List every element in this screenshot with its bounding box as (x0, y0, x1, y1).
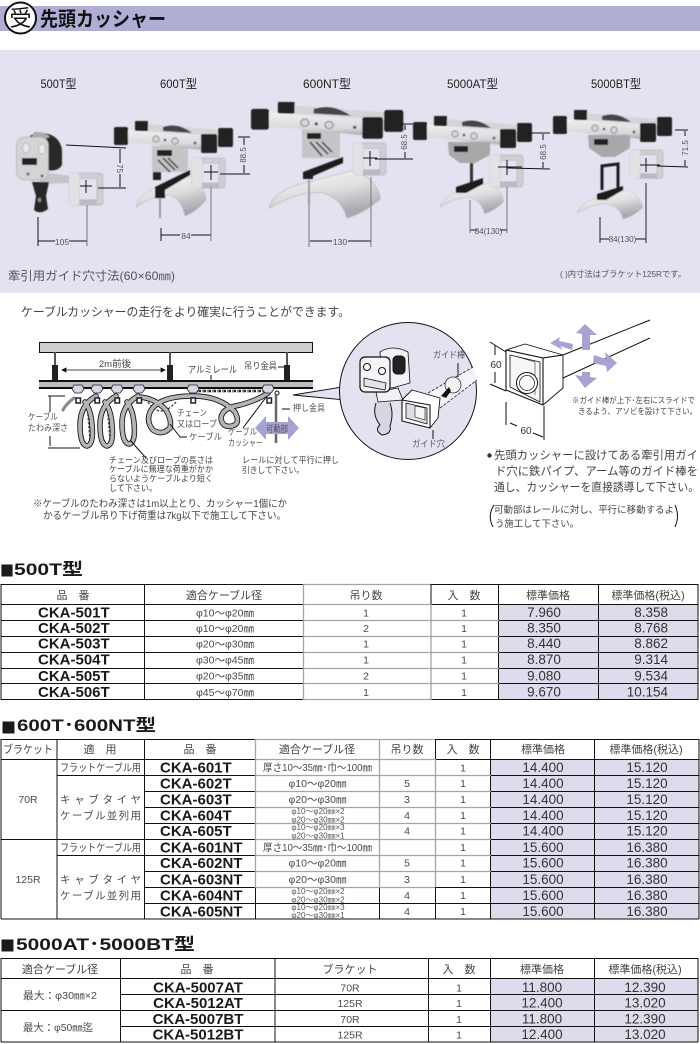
row CKA-602NT: 16.380 (626, 856, 668, 870)
cable size cells: 最大：φ30㎜×2 (23, 989, 97, 1002)
movable part note: う施工して下さい。 (495, 518, 579, 530)
row CKA-506T: φ45～φ70㎜ (196, 687, 254, 699)
trolley (360, 348, 410, 435)
row CKA-602T: CKA-602T (160, 775, 232, 792)
product: 500T: 105 (55, 237, 69, 247)
row CKA-602T: 5 (404, 778, 410, 790)
hanger label: 吊り金具 (244, 360, 277, 371)
arrow: movable part (255, 416, 299, 440)
product: 600T: 88.5 (239, 147, 248, 163)
row CKA-5012BT (153, 1027, 666, 1044)
row CKA-502T: CKA-502T (38, 620, 110, 637)
sag depth dimension: ケーブル (28, 411, 58, 422)
icon: circled 受: 受 (9, 6, 32, 31)
row CKA-602T: φ10～φ20㎜ (289, 778, 347, 790)
row CKA-503T: 8.440 (527, 636, 561, 651)
heading: 5000AT 5000BT: ■ (0, 935, 15, 956)
row CKA-601NT: 16.380 (626, 840, 668, 855)
row CKA-505T: CKA-505T (38, 668, 110, 685)
row CKA-502T: 8.768 (634, 620, 668, 636)
row CKA-601T: 1 (460, 762, 466, 774)
row CKA-602NT: CKA-602NT (160, 855, 243, 872)
row CKA-603NT: 3 (404, 874, 410, 886)
row CKA-506T: 9.670 (527, 684, 561, 700)
row CKA-601T (160, 760, 668, 777)
lead text: ケーブルカッシャーの走行をより確実に行うことができます。 (21, 304, 350, 319)
dimension: 60 height: 60 (490, 360, 502, 371)
row CKA-605T: 4 (404, 826, 410, 838)
heading: 500T (0, 560, 83, 581)
row CKA-604NT: 4 (404, 890, 410, 902)
row CKA-501T: CKA-501T (38, 605, 110, 622)
cable trolley label (228, 396, 267, 448)
row CKA-604NT: φ10～φ20㎜×2 (291, 887, 345, 896)
product: 500T: 75 (115, 164, 124, 173)
row CKA-604T: 1 (460, 810, 466, 822)
row CKA-603T: 3 (404, 794, 410, 806)
2m dimension: 2m前後 (99, 358, 132, 370)
row CKA-603NT: 1 (460, 874, 466, 886)
bracket and use cells: ケーブル並列用 (60, 889, 141, 902)
row CKA-604NT: 15.600 (522, 888, 564, 903)
arrows: slide directions (550, 324, 617, 388)
row CKA-604T: 14.400 (522, 808, 564, 823)
row CKA-605T: φ10～φ20㎜×3 (291, 823, 345, 832)
row CKA-504T: 8.870 (527, 652, 561, 667)
note: sag depth and load: かるケーブル吊り下げ荷重は7kg以下で施工して下さい。 (43, 509, 286, 522)
movable part note (490, 504, 678, 530)
rods (563, 320, 650, 378)
row CKA-604NT: 1 (460, 890, 466, 902)
rail label: アルミレール (188, 365, 237, 376)
cable label: ケーブル (189, 431, 222, 442)
note: parallel push: レールに対して平行に押し (242, 455, 339, 465)
row CKA-601NT: CKA-601NT (160, 839, 243, 856)
row CKA-605NT: 15.600 (522, 904, 564, 919)
product: 5000BT: 84(130) (609, 235, 637, 244)
note: parallel push (242, 455, 339, 475)
row CKA-603NT (160, 871, 668, 888)
row CKA-502T: φ10～φ20㎜ (196, 623, 254, 635)
bracket and use cells: ケーブル並列用 (60, 809, 141, 822)
rail label (188, 365, 237, 382)
product: 600T: 600T型 (160, 77, 197, 91)
row CKA-505T: 9.534 (634, 668, 668, 684)
header row: 適合ケーブル径 (279, 742, 355, 756)
row CKA-501T: 7.960 (527, 605, 561, 620)
note: chain length: して下さい。 (109, 483, 157, 493)
row CKA-603T: CKA-603T (160, 791, 232, 808)
header row: 標準価格(税込) (608, 962, 682, 976)
product: 600T (114, 77, 250, 241)
row CKA-602NT (160, 855, 668, 872)
row CKA-602NT: φ10～φ20㎜ (289, 858, 347, 870)
header row: 適合ケーブル径 (186, 588, 262, 602)
row CKA-5007AT: CKA-5007AT (153, 979, 243, 996)
product: 500T (16, 77, 126, 247)
sag depth dimension: たわみ深さ (28, 423, 68, 433)
row CKA-602T: 1 (460, 778, 466, 790)
bracket and use cells: キャブタイヤ (60, 793, 141, 806)
arrow: movable part: 可動部 (266, 424, 288, 434)
row CKA-5012BT: 125R (337, 1030, 363, 1042)
hangers (52, 352, 290, 380)
row CKA-5007AT: 11.800 (522, 980, 562, 995)
row CKA-5007BT: 1 (456, 1014, 462, 1026)
row CKA-602NT: 1 (460, 858, 466, 870)
row CKA-503T: φ20～φ30㎜ (196, 638, 254, 650)
caption: bracket note: ( )内寸法はブラケット125Rです。 (560, 269, 686, 279)
sag depth dimension (28, 396, 80, 448)
row CKA-501T: 1 (461, 608, 467, 620)
row CKA-604T: 15.120 (626, 808, 668, 823)
row CKA-502T: 1 (461, 623, 467, 635)
row CKA-603T: 1 (460, 794, 466, 806)
row CKA-505T: 9.080 (527, 668, 561, 684)
row CKA-605NT: 1 (460, 906, 466, 918)
product: 5000BT: 5000BT型 (591, 77, 641, 91)
row CKA-604NT: 16.380 (626, 888, 668, 903)
row CKA-5012AT: 125R (337, 998, 363, 1010)
cable size cells (23, 989, 97, 1034)
header row: 入 数 (446, 743, 480, 756)
row CKA-601T: 14.400 (522, 760, 564, 775)
heading: 500T: ■ (0, 560, 14, 581)
cable trolley label: ケーブル (228, 426, 257, 437)
header row: 入 数 (448, 589, 480, 602)
icon: circled 受 (5, 2, 36, 34)
dimension: 60 width: 60 (520, 426, 532, 437)
header row: 標準価格(税込) (611, 588, 685, 602)
row CKA-5012AT: 1 (456, 998, 462, 1010)
heading: 600T 600NT: 600T･600NT型 (17, 716, 156, 735)
note: slide play (572, 395, 697, 416)
row CKA-605T: 1 (460, 826, 466, 838)
row CKA-5007BT: 11.800 (522, 1012, 562, 1026)
table: 5000AT 5000BT (1, 958, 698, 1044)
bracket and use cells: フラットケーブル用 (60, 841, 141, 854)
guide instruction text (487, 448, 699, 494)
row CKA-603NT: 16.380 (626, 872, 668, 887)
row CKA-5012AT: CKA-5012AT (153, 995, 243, 1012)
row CKA-603T (160, 791, 668, 808)
title band (0, 2, 700, 34)
row CKA-5012AT: 12.400 (521, 996, 563, 1010)
row CKA-5012BT: CKA-5012BT (153, 1027, 243, 1044)
row CKA-603T: 15.120 (626, 792, 668, 807)
heading: 5000AT 5000BT: 5000AT･5000BT型 (16, 935, 195, 954)
row CKA-605T: CKA-605T (160, 823, 232, 840)
row CKA-506T: 1 (461, 687, 467, 699)
callout: guide detail: ガイド穴 (412, 439, 445, 449)
row CKA-502T: 8.350 (527, 620, 561, 636)
header row: 吊り数 (350, 589, 382, 602)
row CKA-5007AT: 70R (340, 982, 360, 994)
row CKA-605NT: φ20～φ30㎜×1 (291, 911, 345, 920)
row CKA-604T: 4 (404, 810, 410, 822)
cables (63, 393, 268, 446)
aluminium rail (39, 380, 313, 389)
table: 500T (1, 584, 698, 701)
row CKA-502T (38, 620, 668, 637)
row CKA-601NT: 厚さ10～35㎜･巾～100㎜ (263, 841, 372, 854)
pusher bracket (130, 391, 325, 458)
header row: 吊り数 (390, 743, 424, 756)
row CKA-605T: φ20～φ30㎜×1 (291, 832, 345, 840)
trolleys (72, 385, 274, 403)
bracket and use cells: キャブタイヤ (60, 873, 141, 886)
row CKA-603NT: CKA-603NT (160, 871, 243, 888)
row CKA-503T: CKA-503T (38, 636, 110, 653)
chain (87, 391, 266, 440)
header row (22, 962, 682, 976)
row CKA-501T: 8.358 (634, 605, 668, 620)
row CKA-605T: 15.120 (626, 824, 668, 838)
row CKA-501T: φ10～φ20㎜ (196, 608, 254, 620)
row CKA-604NT: φ20～φ30㎜×2 (291, 896, 345, 904)
row CKA-501T (38, 605, 668, 622)
header row: 標準価格 (521, 742, 565, 756)
row CKA-504T: φ30～φ45㎜ (196, 654, 254, 666)
header row: 適合ケーブル径 (22, 962, 98, 976)
note: parallel push: 引きして下さい。 (242, 465, 304, 475)
row CKA-605NT: φ10～φ20㎜×3 (291, 903, 345, 912)
header row: 品 番 (184, 743, 216, 756)
row CKA-5007BT (153, 1011, 666, 1028)
row CKA-601NT (160, 839, 668, 856)
panel: product lineup (0, 50, 700, 293)
row CKA-503T: 1 (363, 638, 369, 650)
row CKA-5012AT: 13.020 (624, 996, 666, 1010)
bracket and use cells: 70R (18, 794, 38, 806)
product: 500T: 500T型 (40, 77, 76, 91)
product: 600NT (251, 77, 413, 247)
row CKA-605NT: 16.380 (626, 904, 668, 919)
row CKA-506T: 1 (363, 687, 369, 699)
row CKA-505T: φ20～φ35㎜ (196, 670, 254, 682)
note: chain length: らないようケーブルより短く (109, 474, 213, 484)
heading: 600T 600NT: ■ (1, 717, 16, 738)
row CKA-602NT: 15.600 (522, 856, 564, 870)
product: 5000AT: 84(130) (475, 227, 503, 236)
header row: 標準価格 (526, 588, 570, 602)
product: 5000AT (413, 77, 550, 236)
header row: 標準価格(税込) (609, 742, 683, 756)
ceiling beam (40, 342, 312, 352)
row CKA-504T (38, 652, 668, 669)
row CKA-602T: 14.400 (522, 776, 564, 791)
row CKA-501T: 1 (363, 608, 369, 620)
chain label: 又はロープ (177, 419, 217, 429)
header row: 品 番 (180, 963, 214, 976)
caption: guide hole size: 牽引用ガイド穴寸法(60×60㎜) (8, 269, 175, 283)
row CKA-603T: 14.400 (522, 792, 564, 807)
cable size cells: 最大：φ50㎜迄 (23, 1021, 93, 1034)
row CKA-604T: φ20～φ30㎜×2 (291, 816, 345, 824)
product: 5000AT: 5000AT型 (447, 77, 498, 91)
header row: 入 数 (442, 963, 476, 976)
row CKA-601NT: 1 (460, 842, 466, 854)
bracket and use cells (15, 761, 141, 902)
dimension: 60 height (490, 342, 506, 391)
row CKA-504T: 1 (363, 654, 369, 666)
row CKA-503T: 1 (461, 638, 467, 650)
header row (3, 742, 683, 756)
row CKA-5007BT: 12.390 (624, 1012, 666, 1026)
product: 5000AT: 68.5 (539, 144, 548, 160)
row CKA-601NT: 15.600 (522, 840, 564, 855)
bracket and use cells: 125R (15, 874, 41, 886)
row CKA-604T: CKA-604T (160, 807, 232, 824)
note: chain length: チェーン及びロープの長さは (109, 455, 213, 465)
note: chain length: ケーブルに無理な荷重がかか (109, 464, 213, 474)
heading: 600T 600NT (1, 716, 156, 738)
product: 600NT: 600NT型 (303, 77, 351, 91)
row CKA-602NT: 5 (404, 858, 410, 870)
product: 5000BT (553, 77, 690, 244)
guide instruction text: 先頭カッシャーに設けてある牽引用ガイ (494, 448, 698, 462)
row CKA-5007BT: CKA-5007BT (153, 1011, 243, 1028)
row CKA-5007AT (153, 979, 666, 996)
row CKA-5007BT: 70R (340, 1014, 360, 1026)
row CKA-605NT: CKA-605NT (160, 903, 243, 920)
tube (506, 344, 563, 405)
header row: ブラケット (322, 962, 378, 976)
product: 600NT: 130 (333, 237, 347, 247)
guide hole square (402, 390, 440, 428)
row CKA-505T: 2 (363, 670, 369, 682)
title: 先頭カッシャー (40, 8, 166, 31)
guide tube figure (490, 320, 697, 440)
product: 600T: 84 (181, 231, 191, 241)
row CKA-604NT: CKA-604NT (160, 887, 243, 904)
row CKA-5007AT: 12.390 (624, 980, 666, 995)
row CKA-506T: 10.154 (627, 684, 668, 700)
row CKA-603NT: 15.600 (522, 872, 564, 887)
row CKA-5012BT: 13.020 (624, 1027, 666, 1042)
row CKA-605T: 14.400 (522, 824, 564, 838)
row CKA-506T: CKA-506T (38, 684, 110, 701)
row CKA-604NT (160, 887, 668, 904)
row CKA-602T (160, 775, 668, 792)
row CKA-505T: 1 (461, 670, 467, 682)
row CKA-601T: 15.120 (626, 760, 668, 775)
row CKA-5012BT: 12.400 (521, 1027, 563, 1042)
movable part note: 可動部はレールに対し、平行に移動するよ (494, 504, 674, 516)
row CKA-605NT: 4 (404, 906, 410, 918)
guide instruction text: ド穴に鉄パイプ、アーム等のガイド棒を (495, 464, 698, 478)
product: 600NT: 68.5 (400, 134, 409, 150)
row CKA-504T: 9.314 (634, 652, 668, 667)
guide bar (428, 367, 477, 408)
header row: 適 用 (84, 742, 116, 756)
row CKA-5012AT (153, 995, 666, 1012)
row CKA-605NT (160, 903, 668, 920)
row CKA-604T (160, 807, 668, 824)
installation diagram (28, 322, 477, 522)
header row: ブラケット (3, 742, 53, 756)
row CKA-5012BT: 1 (456, 1030, 462, 1042)
row CKA-5007AT: 1 (456, 982, 462, 994)
row CKA-506T (38, 684, 668, 701)
row CKA-603NT: φ20～φ30㎜ (289, 874, 347, 886)
header row: 標準価格 (520, 962, 564, 976)
bracket and use cells: フラットケーブル用 (60, 761, 141, 774)
header row (56, 588, 685, 602)
row CKA-504T: 1 (461, 654, 467, 666)
row CKA-605T (160, 823, 668, 840)
row CKA-604T: φ10～φ20㎜×2 (291, 807, 345, 816)
row CKA-601T: CKA-601T (160, 760, 232, 777)
row CKA-602T: 15.120 (626, 776, 668, 791)
cable trolley label: カッシャー (228, 438, 263, 448)
callout: guide detail: ガイド棒 (433, 349, 465, 360)
row CKA-603T: φ20～φ30㎜ (289, 794, 347, 806)
row CKA-504T: CKA-504T (38, 652, 110, 669)
note: chain length (109, 455, 213, 493)
chain label: チェーン (177, 408, 207, 418)
row CKA-503T (38, 636, 668, 653)
note: sag depth and load (33, 497, 287, 522)
heading: 5000AT 5000BT (0, 935, 195, 956)
chain label (177, 408, 217, 429)
row CKA-505T (38, 668, 668, 685)
callout: guide detail (293, 322, 477, 460)
note: sag depth and load: ※ケーブルのたわみ深さは1m以上とり、カッシャー1個にか (33, 497, 287, 510)
row CKA-601T: 厚さ10～35㎜･巾～100㎜ (263, 761, 372, 774)
row CKA-502T: 2 (363, 623, 369, 635)
table: 600T 600NT (1, 739, 699, 920)
product: 5000BT: 71.5 (681, 140, 690, 156)
pusher bracket: 押し金具 (293, 402, 325, 413)
heading: 500T: 500T型 (14, 560, 83, 579)
dimension: 60 width (506, 402, 544, 440)
header row: 品 番 (56, 589, 90, 602)
row CKA-503T: 8.862 (634, 636, 668, 651)
2m dimension (62, 358, 165, 372)
cable label (170, 424, 222, 442)
